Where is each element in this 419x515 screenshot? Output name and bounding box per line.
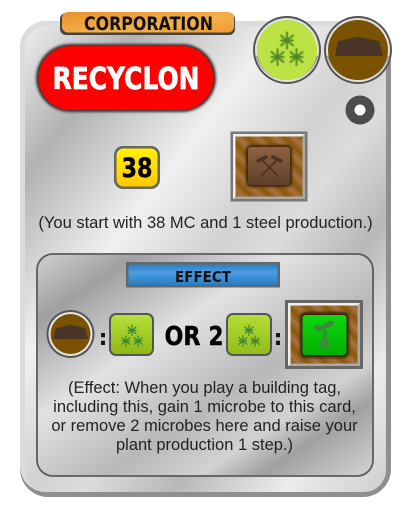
colon: : [274, 326, 282, 351]
plant production icon [285, 300, 363, 369]
megacredits: 38: 38 [122, 153, 152, 184]
OR 2: 2 [208, 322, 224, 352]
icon: crossed hammers [258, 157, 281, 176]
steel production icon [230, 132, 308, 202]
tag: microbe [253, 16, 321, 84]
icon: building tag [46, 310, 94, 358]
effect label: EFFECT [175, 268, 231, 286]
megacredits: 38 [114, 146, 160, 189]
starting description: (You start with 38 MC and 1 steel production.) [38, 214, 373, 232]
effect description: plant production 1 step.) [116, 436, 293, 454]
resource placeholder dot [346, 96, 374, 124]
OR 2: OR [164, 322, 200, 352]
effect description: including this, gain 1 microbe to this card, [53, 398, 356, 416]
tag: building [324, 16, 392, 84]
effect description: or remove 2 microbes here and raise your [51, 417, 358, 435]
effect description [51, 379, 358, 454]
colon: : [99, 326, 107, 351]
panel: effect [37, 254, 373, 476]
icon: microbe resource [226, 313, 272, 356]
card title: Recyclon [36, 44, 216, 112]
card title: Recyclon: RECYCLON [52, 62, 200, 97]
icon: microbe resource [109, 313, 154, 356]
effect description: (Effect: When you play a building tag, [68, 379, 341, 397]
icon: seedling [313, 319, 335, 348]
effect label [126, 262, 280, 288]
corporation label: CORPORATION [84, 13, 213, 35]
